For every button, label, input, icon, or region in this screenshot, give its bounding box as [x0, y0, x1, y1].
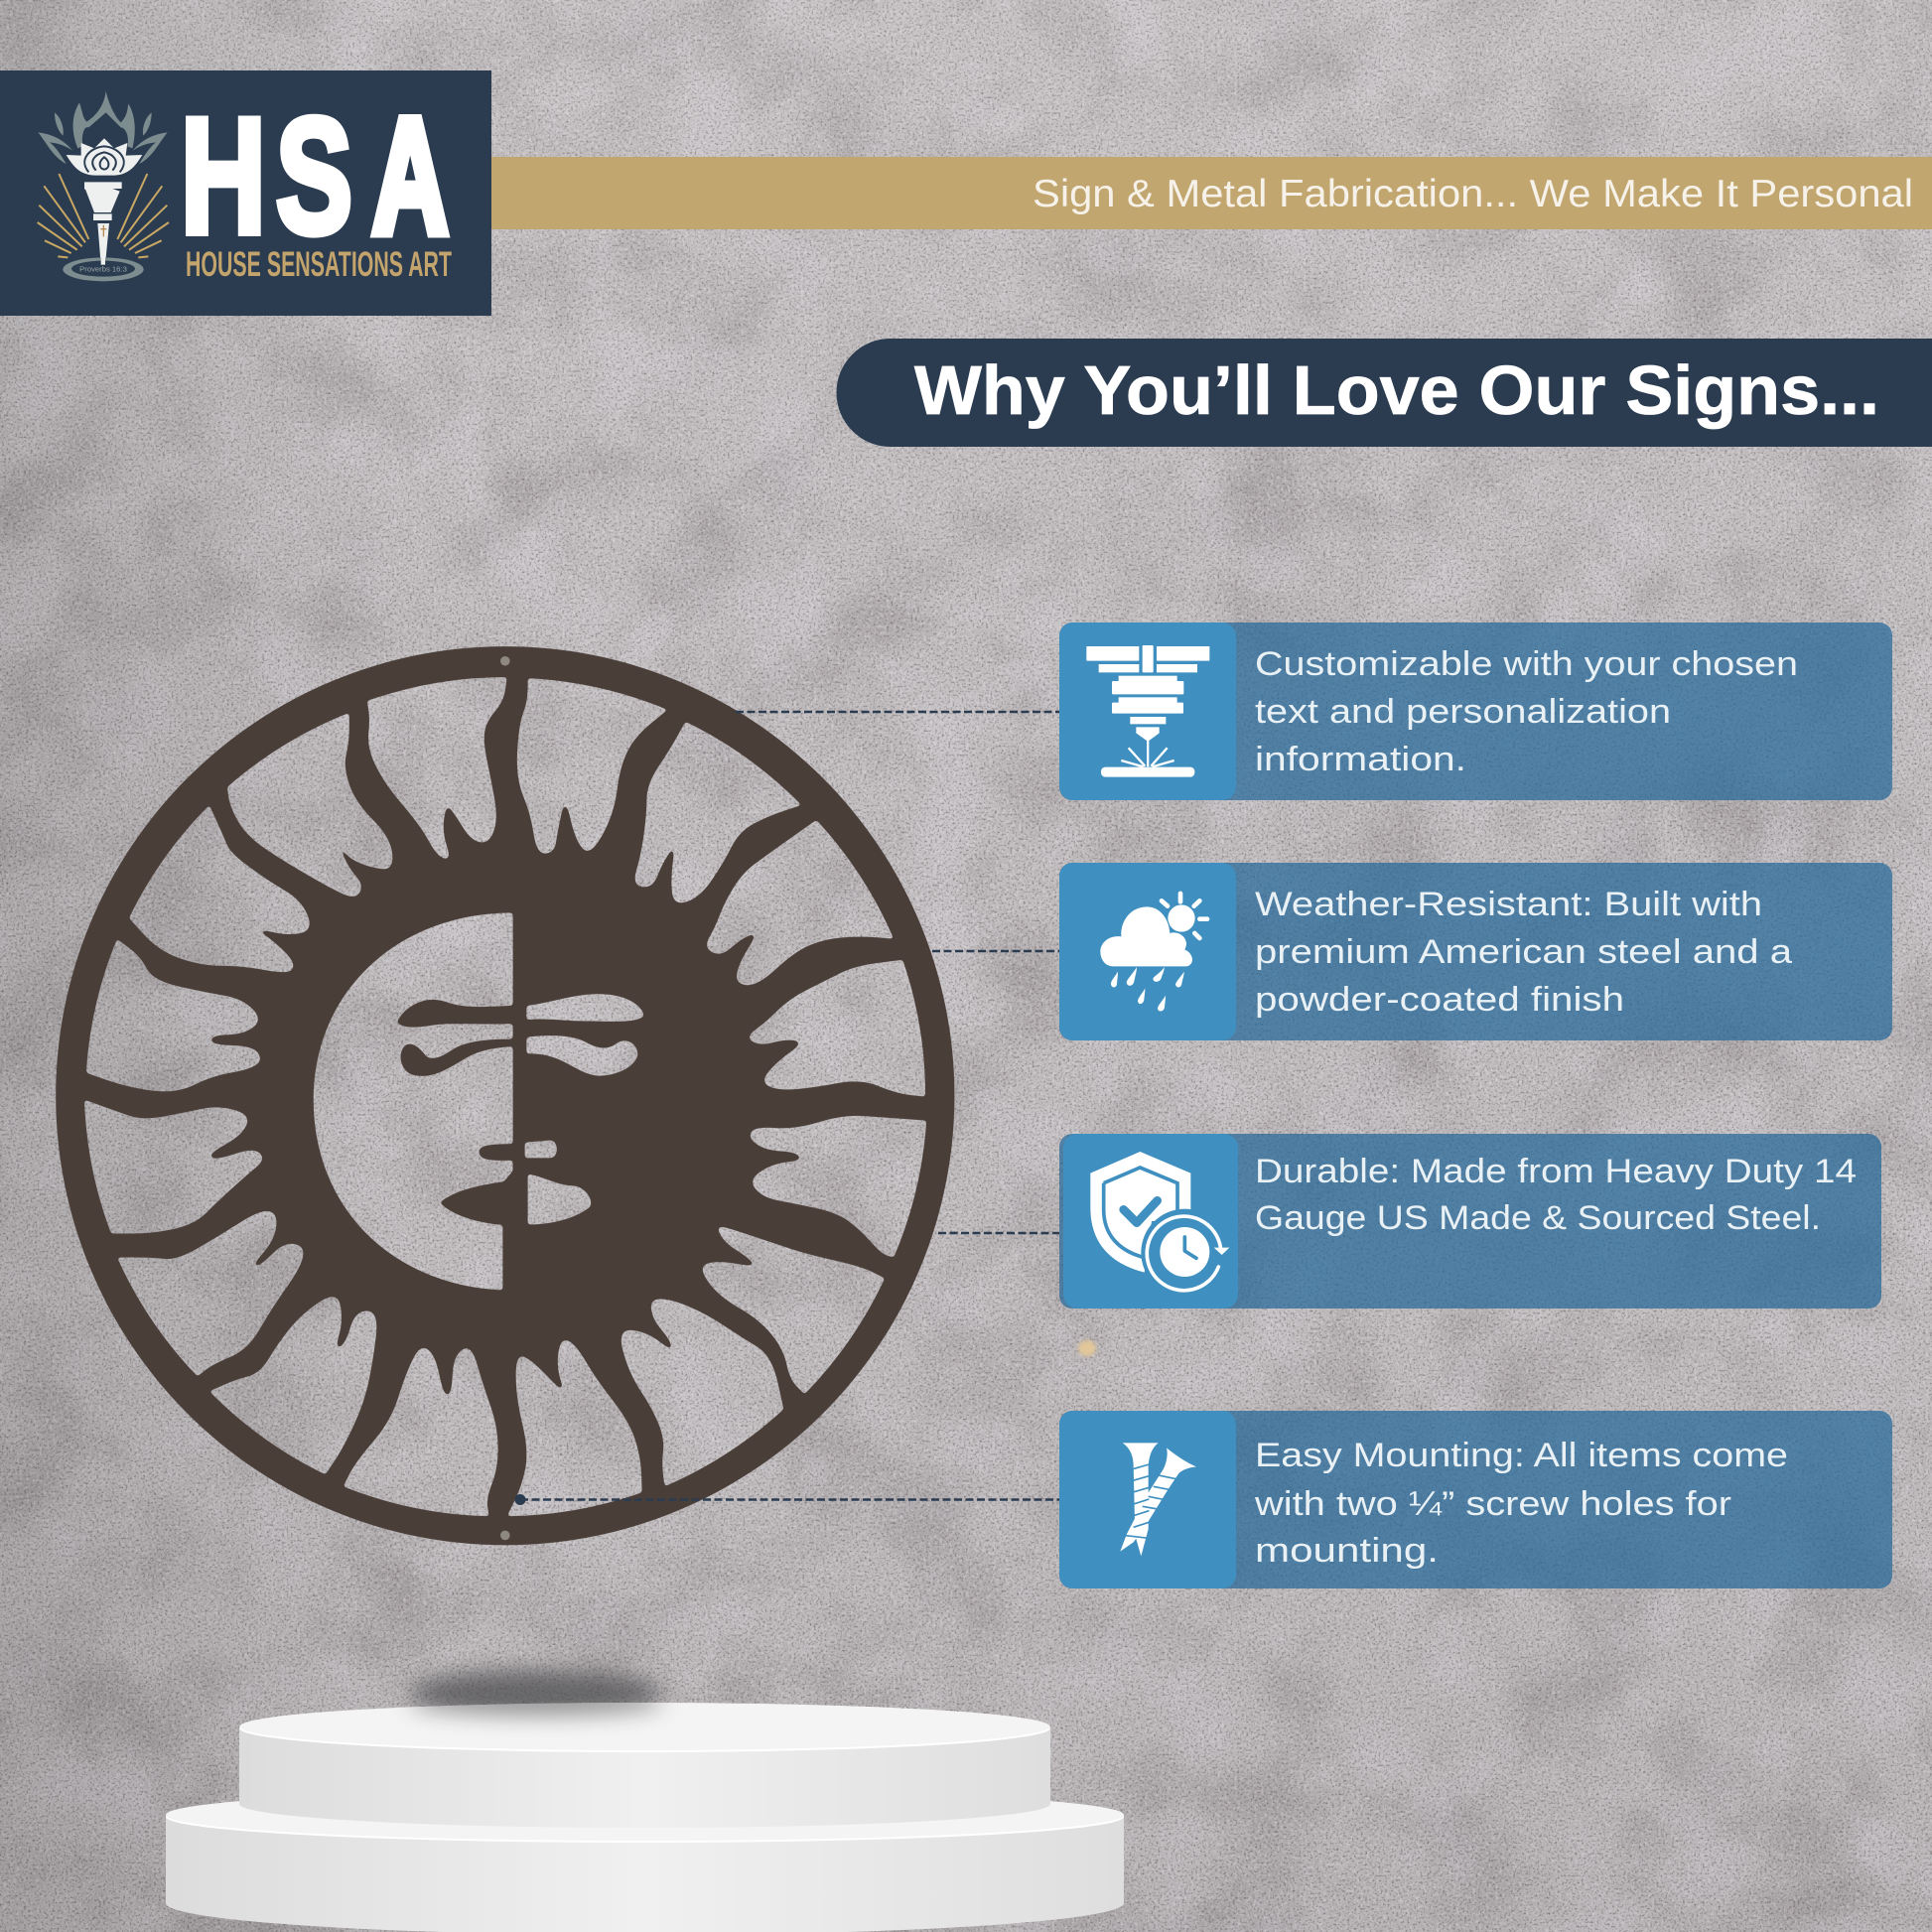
card text: Weather-Resistant: Built with [1255, 886, 1762, 923]
icon: shield with clock [1090, 1152, 1229, 1297]
connector line 3 [938, 1232, 1059, 1234]
feature card: durable [1059, 1134, 1881, 1309]
mounting screw top [500, 656, 510, 666]
metal sun and moon sign [56, 646, 954, 1545]
sign shadow [409, 1670, 663, 1718]
white pedestal [166, 1688, 1124, 1932]
card text: Gauge US Made & Sourced Steel. [1255, 1199, 1821, 1237]
tagline text: Sign & Metal Fabrication... We Make It Personal [1033, 173, 1913, 215]
connector line 2 [932, 950, 1059, 952]
icon: two screws [1120, 1443, 1196, 1556]
feature card: weather-resistant [1059, 863, 1892, 1040]
logo panel [0, 70, 491, 316]
wordmark HSA: H [181, 85, 266, 268]
card text: mounting. [1255, 1532, 1439, 1570]
heading pill [836, 339, 1932, 447]
moon face: dark brow, eye, nose and lips [397, 1000, 519, 1224]
card text [1255, 1153, 1857, 1237]
heading text: Why You’ll Love Our Signs... [914, 351, 1879, 429]
connector line 1 [736, 711, 1059, 713]
card text: with two ¼” screw holes for [1254, 1485, 1731, 1523]
gold tagline band [491, 157, 1932, 229]
wordmark subtitle: HOUSE SENSATIONS ART [186, 245, 452, 284]
connector line 4 with dot [514, 1494, 1059, 1505]
card text: Easy Mounting: All items come [1255, 1437, 1788, 1474]
icon: sun, cloud and rain [1100, 894, 1207, 1011]
card text: text and personalization [1255, 693, 1671, 731]
feature card: customizable [1059, 622, 1892, 800]
card text [1255, 645, 1798, 778]
mounting screw bottom [500, 1531, 510, 1540]
feature card: easy mounting [1059, 1411, 1892, 1588]
card text: powder-coated finish [1255, 981, 1624, 1019]
icon: torch logo: Proverbs 16:3 [79, 264, 127, 273]
wordmark HSA: S [276, 85, 352, 268]
icon: torch logo [38, 91, 169, 281]
card text [1254, 1437, 1788, 1570]
icon: laser cutter [1086, 645, 1209, 777]
wordmark HSA: A [372, 85, 448, 268]
card text: Durable: Made from Heavy Duty 14 [1255, 1153, 1857, 1190]
card text: Customizable with your chosen [1255, 645, 1798, 683]
card text: premium American steel and a [1255, 933, 1793, 971]
card text [1255, 886, 1793, 1019]
card text: information. [1255, 741, 1466, 778]
wordmark HSA [181, 85, 448, 268]
